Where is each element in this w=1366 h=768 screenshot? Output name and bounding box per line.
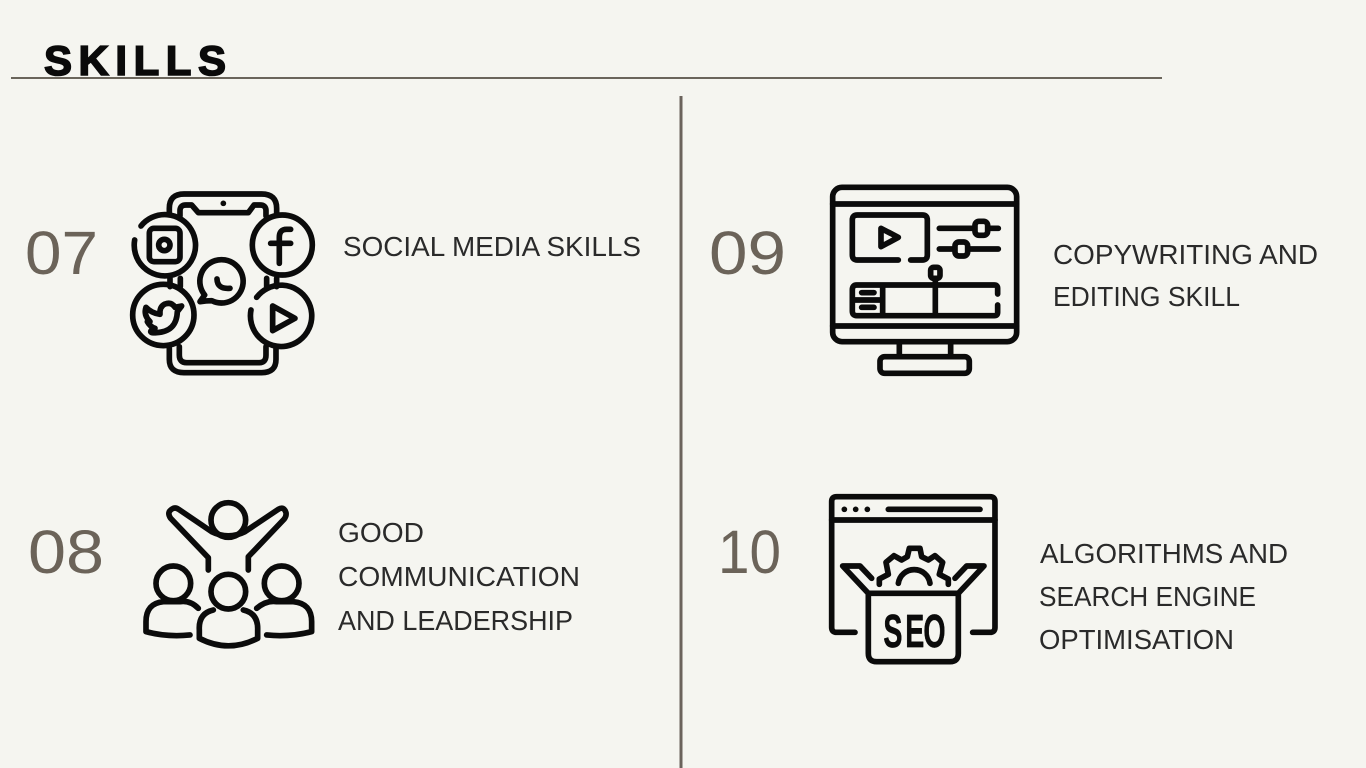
label [1039,538,1288,655]
label: SEARCH ENGINE [1039,581,1256,612]
icon: phone with social media [133,194,312,373]
panel: algorithms and seo [718,497,1288,662]
panel: copywriting and editing [709,187,1318,373]
icon: seo box in browser window: SEO [883,606,946,658]
label [338,517,580,636]
panel: social media skills [25,194,641,373]
label: GOOD [338,517,424,548]
number 10: 10 [718,518,781,586]
number 08: 08 [28,518,104,586]
label: SOCIAL MEDIA SKILLS [343,231,641,262]
icon: monitor with video editor [833,187,1017,373]
title: SKILLS [44,37,226,84]
label: ALGORITHMS AND [1040,538,1288,569]
label: OPTIMISATION [1039,624,1234,655]
label: AND LEADERSHIP [338,605,573,636]
label [1053,239,1318,312]
icon: leader and team [146,503,312,646]
label: COMMUNICATION [338,561,580,592]
number 07: 07 [25,219,98,287]
label: COPYWRITING AND [1053,239,1318,270]
panel: communication and leadership [28,503,580,646]
number 09: 09 [709,219,786,287]
icon: seo box in browser window [832,497,995,662]
label: EDITING SKILL [1053,281,1240,312]
